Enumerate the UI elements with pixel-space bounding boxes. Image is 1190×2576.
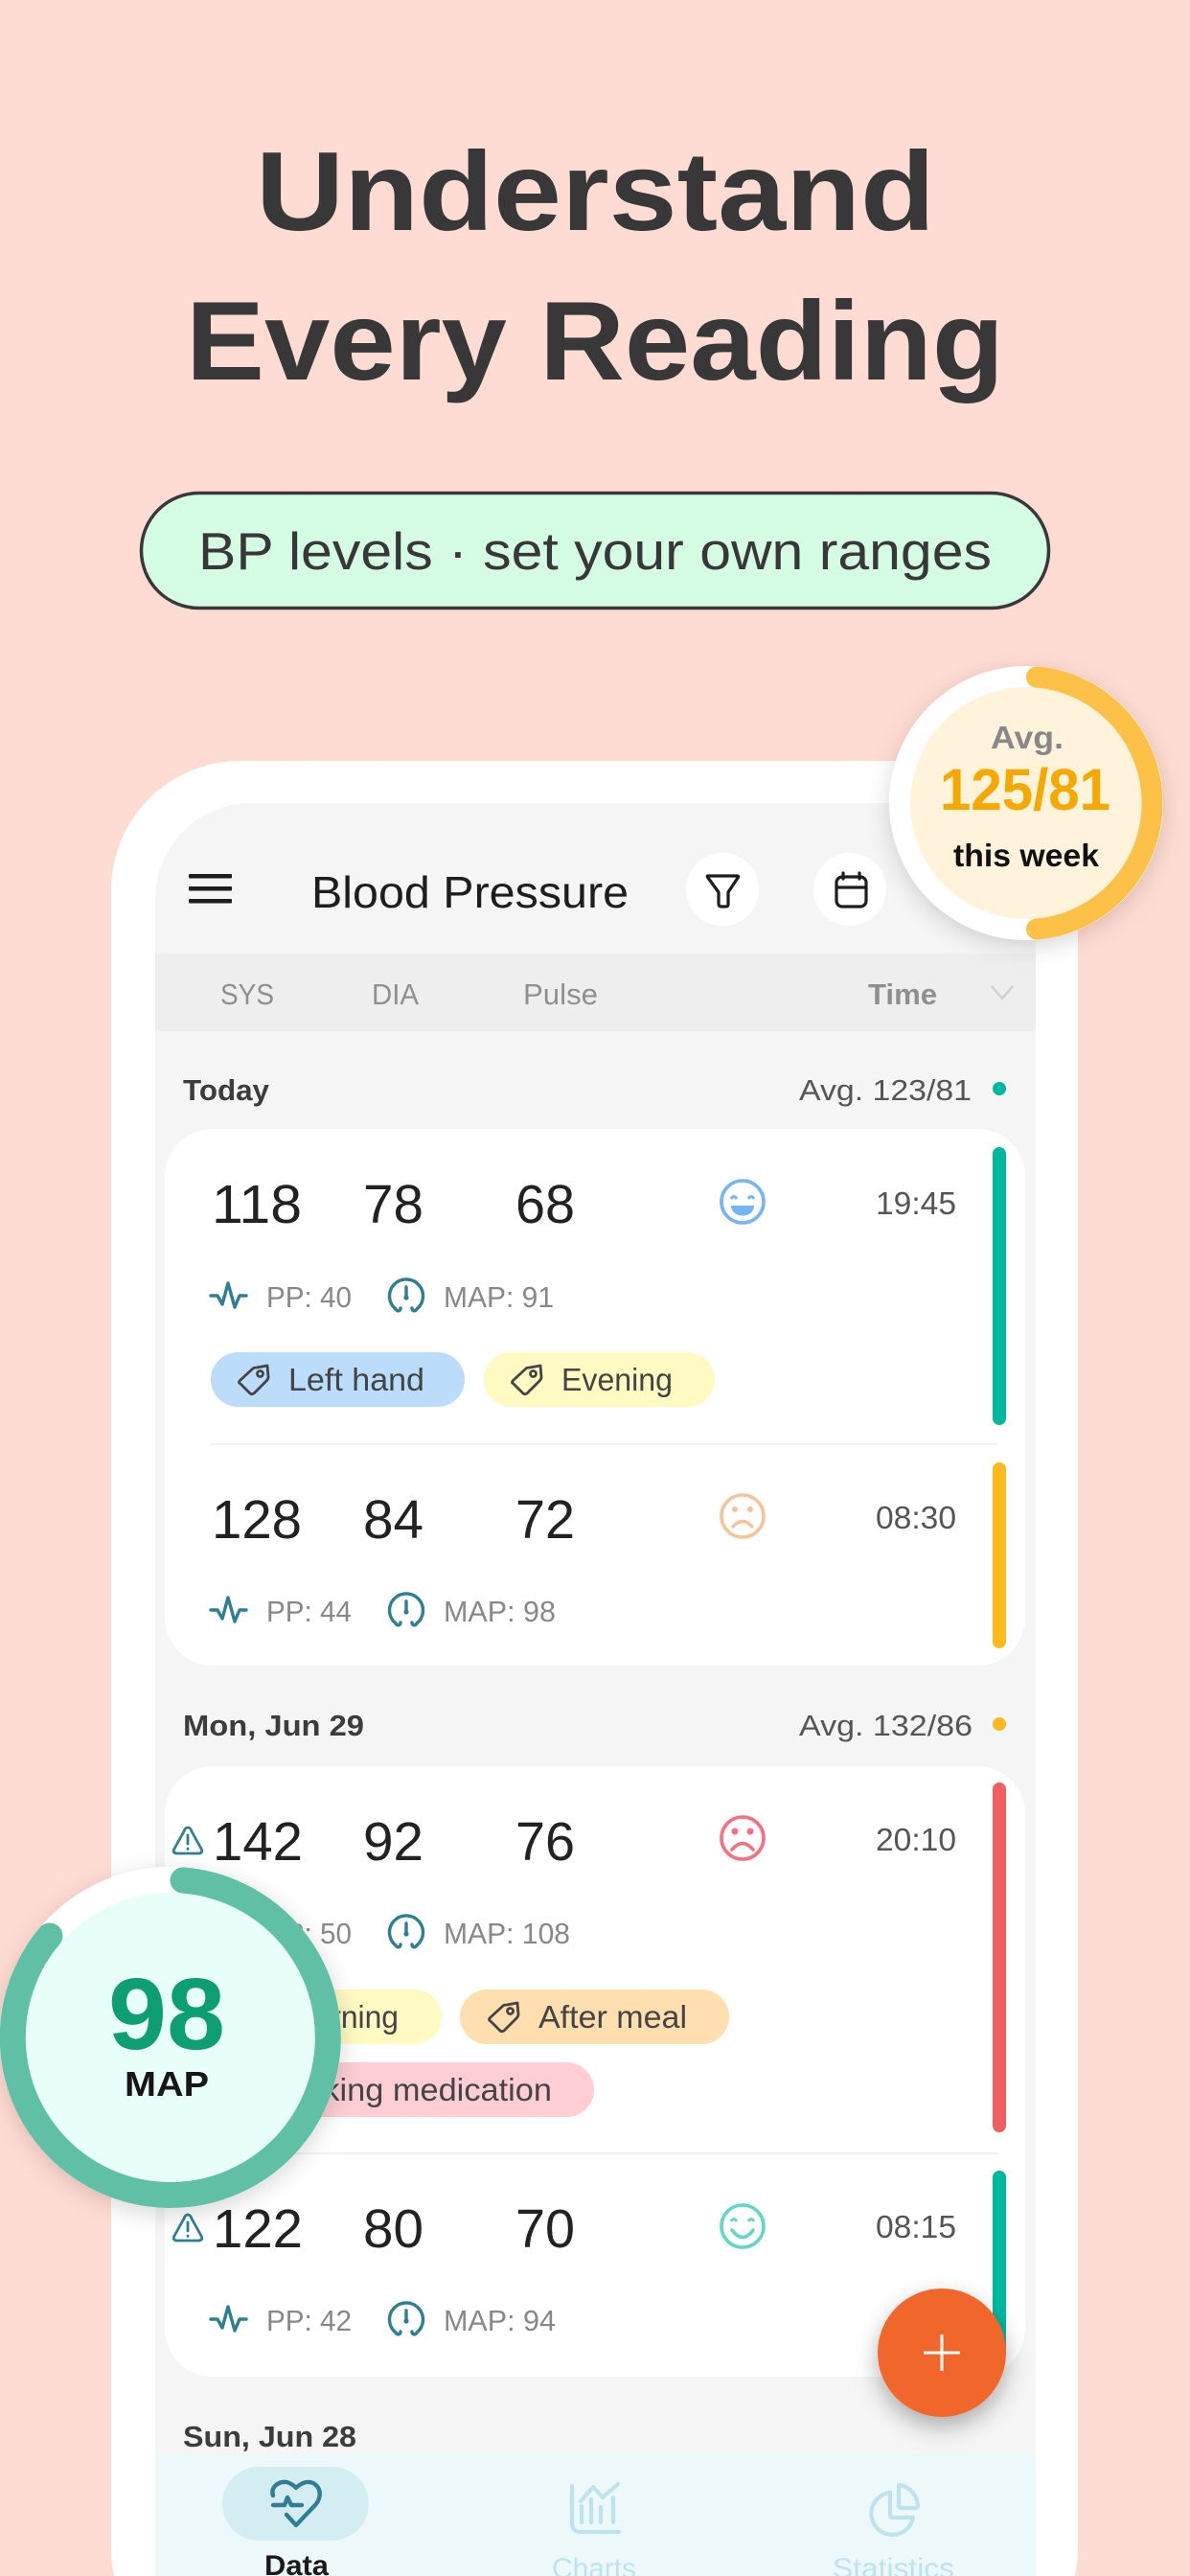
reading 19:45: 19:45	[876, 1185, 956, 1221]
reading 08:30: 08:30	[876, 1500, 956, 1535]
reading 20:10: PP: 50	[266, 1917, 352, 1950]
reading 08:30: 72	[515, 1489, 575, 1551]
tag: After meal	[460, 1990, 729, 2044]
screen	[155, 803, 1036, 2576]
day heading: Today: Today	[183, 1073, 270, 1107]
tag: Taking medication: Taking medication	[288, 2072, 552, 2107]
icon: teal smile	[721, 2205, 764, 2247]
column header band	[155, 954, 1036, 1031]
reading 08:30: 84	[363, 1489, 423, 1551]
reading 08:15: 08:15	[876, 2209, 956, 2244]
reading 19:45	[211, 1147, 1006, 1425]
column header band: SYS	[220, 978, 274, 1011]
reading 08:30: PP: 44	[266, 1595, 352, 1628]
title: Understand	[256, 128, 935, 254]
app header	[189, 853, 886, 926]
floating add button	[878, 2288, 1006, 2417]
reading 20:10: 20:10	[876, 1822, 956, 1857]
card: today	[165, 1129, 1025, 1666]
day heading: Sun, Jun 28: Sun, Jun 28	[183, 2420, 356, 2453]
icon: menu	[189, 874, 232, 903]
reading 19:45: 78	[363, 1174, 423, 1235]
tag: Morning	[211, 1990, 442, 2044]
icon: red sad face	[721, 1817, 764, 1859]
column header band: Time	[868, 978, 937, 1011]
reading 08:30: MAP: 98	[444, 1595, 556, 1628]
card: Jun 29	[165, 1766, 1025, 2377]
reading 19:45: 68	[515, 1174, 575, 1235]
reading 08:30: 128	[212, 1489, 302, 1551]
nav: Charts	[552, 2484, 636, 2576]
reading 08:15: PP: 42	[266, 2304, 352, 2337]
reading 08:15: 80	[363, 2198, 423, 2260]
reading 20:10	[173, 1782, 1006, 2132]
tag: Taking medication	[211, 2062, 594, 2117]
day heading: Mon, Jun 29	[183, 1709, 1006, 1742]
reading 20:10: 76	[515, 1811, 575, 1873]
title	[186, 128, 1004, 403]
badge: weekly average: Avg.	[991, 720, 1064, 755]
badge: MAP: 98	[108, 1958, 225, 2071]
column header band: DIA	[372, 978, 419, 1011]
nav: Statistics	[833, 2485, 954, 2576]
tag: After meal: After meal	[538, 1999, 687, 2035]
reading 19:45: 118	[212, 1174, 302, 1235]
badge: weekly average: this week	[953, 838, 1100, 873]
reading 08:15: 70	[515, 2198, 575, 2260]
reading 20:10: 142	[213, 1811, 303, 1873]
reading 19:45: MAP: 91	[444, 1280, 554, 1314]
tag: Left hand	[211, 1352, 465, 1407]
badge: weekly average: 125/81	[940, 757, 1110, 822]
reading 08:30	[211, 1462, 1006, 1648]
reading 08:15	[173, 2171, 1006, 2358]
day heading: Mon, Jun 29: Mon, Jun 29	[183, 1709, 364, 1742]
phone frame	[111, 761, 1078, 2576]
column header band: Pulse	[523, 978, 598, 1011]
phone mockup	[111, 761, 1078, 2576]
badge: MAP: MAP	[125, 2064, 209, 2104]
reading 08:15: MAP: 94	[444, 2304, 556, 2337]
icon: sad face	[721, 1495, 764, 1537]
tag: Evening	[484, 1352, 715, 1407]
tag: Left hand: Left hand	[288, 1362, 424, 1397]
tag: Morning: Morning	[288, 1999, 399, 2035]
badge: MAP	[0, 1867, 341, 2208]
reading 20:10: MAP: 108	[444, 1917, 570, 1950]
icon: calendar	[813, 853, 886, 926]
app title: Blood Pressure	[311, 867, 629, 917]
day heading: Today	[183, 1073, 1006, 1107]
icon: happy face	[721, 1181, 764, 1223]
nav: Data	[222, 2467, 369, 2576]
tag: Evening: Evening	[561, 1362, 673, 1397]
title: Every Reading	[186, 278, 1004, 403]
reading 19:45: PP: 40	[266, 1280, 352, 1314]
bottom navigation	[155, 2454, 1036, 2576]
icon: filter	[686, 853, 759, 926]
reading 20:10: 92	[363, 1811, 423, 1873]
reading 08:15: 122	[213, 2198, 303, 2260]
day heading: Today: Avg. 123/81	[799, 1073, 972, 1107]
day heading: Mon, Jun 29: Avg. 132/86	[799, 1709, 973, 1742]
subtitle pill	[142, 493, 1048, 608]
subtitle pill: BP levels · set your own ranges	[198, 521, 992, 581]
badge: weekly average	[889, 666, 1163, 940]
